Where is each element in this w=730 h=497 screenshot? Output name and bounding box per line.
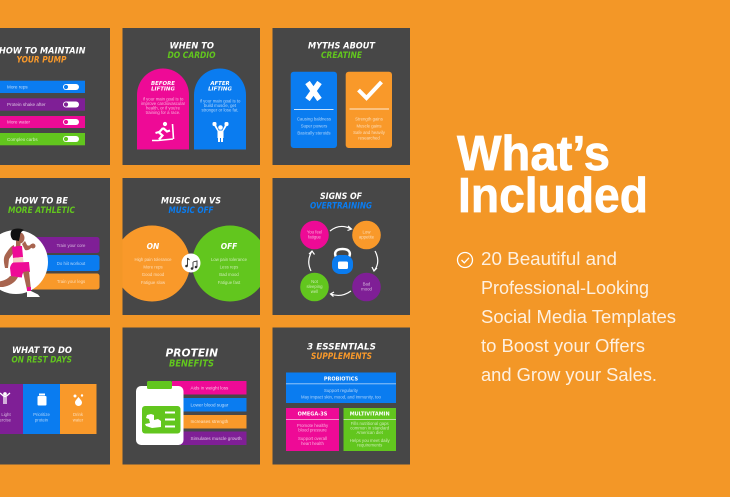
heading: do cardio: DO CARDIO (168, 51, 216, 61)
icon: weightlifter (212, 122, 228, 142)
circle: not sleeping well: well (311, 289, 318, 294)
panel: how to be more athletic (0, 178, 110, 315)
title: what's included (457, 127, 648, 223)
circle: you feel fatigue (300, 221, 329, 249)
heading: music on vs: MUSIC ON VS (161, 196, 221, 206)
arch: before lifting (137, 68, 189, 150)
illustration: athlete lunging in white circle (0, 228, 48, 297)
heading: more athletic: MORE ATHLETIC (8, 206, 75, 216)
icon: treadmill runner (152, 122, 174, 140)
step: drink water: water (73, 418, 84, 422)
arch: after lifting: LIFTING (208, 86, 232, 92)
panel: 3 essentials supplements (272, 328, 410, 464)
step: light exercise (0, 384, 28, 434)
heading: when to: WHEN TO (170, 42, 214, 52)
toggle row: more water: More water (7, 120, 30, 125)
card: myths: Basically steroids (297, 130, 331, 136)
cycle arrows (309, 226, 378, 296)
panel: when to do cardio (122, 28, 260, 165)
card: omega-3s: Support overall (298, 436, 327, 441)
icon: figure with barbell (0, 393, 10, 404)
card: multivitamin: Helps you meet daily (350, 438, 390, 443)
pill: do hiit workout: Do hiit workout (57, 261, 86, 266)
card: myths: Super powers (301, 124, 327, 128)
step: prioritize protein: protein (35, 418, 49, 422)
step: prioritize protein (23, 384, 65, 434)
panel: music on vs music off (122, 178, 260, 315)
bar: increases strength: Increases strength (190, 419, 229, 424)
card: probiotics: Support regularity (324, 388, 359, 393)
card: multivitamin: common in standard (350, 426, 390, 430)
circle: low appetite: appetite (359, 234, 375, 240)
card: multivitamin: Fills nutritional gaps (351, 421, 389, 426)
card: facts (346, 72, 392, 148)
circle: off: OFF (221, 242, 238, 251)
pill: train your legs: Train your legs (57, 279, 85, 284)
bar: lower blood sugar: Lower blood sugar (190, 402, 229, 408)
description text (481, 249, 676, 385)
circle: off: Low pain tolerance (211, 257, 248, 262)
circle: bad mood: Bad (363, 282, 371, 286)
arch: after lifting: stronger or lose fat. (201, 108, 239, 112)
circle: bad mood (352, 273, 381, 301)
card: facts: Safe and heavily (353, 130, 386, 135)
circle: off: Bad mood (219, 272, 239, 277)
title: what's included: What’s (457, 127, 610, 181)
circle: off (193, 226, 260, 302)
heading: how to be: HOW TO BE (15, 196, 68, 206)
card: omega-3s: Promote healthy (297, 423, 329, 428)
card: probiotics: May impact skin, mood, and immunity, too (301, 394, 382, 400)
circle: on (122, 226, 189, 302)
heading: 3 essentials: 3 ESSENTIALS (307, 343, 376, 353)
bar: simulates muscle growth: Simulates muscle growth (190, 436, 242, 441)
circle: not sleeping well: sleeping (306, 284, 323, 289)
step: light exercise: Light (1, 412, 11, 417)
card: omega-3s: heart health (301, 441, 324, 446)
card: facts: researched (358, 136, 380, 140)
arch: after lifting: AFTER (209, 81, 230, 87)
description text: Professional-Looking (481, 278, 649, 298)
heading: creatine: CREATINE (321, 51, 362, 61)
heading: supplements: SUPPLEMENTS (311, 352, 372, 362)
panel: signs of overtraining (272, 178, 410, 315)
card: multivitamin (344, 408, 396, 451)
circle: not sleeping well (300, 273, 329, 301)
bar: aids in weight loss: Aids in weight loss (190, 386, 229, 390)
card: probiotics (286, 372, 396, 403)
toggle row: more reps: More reps (7, 85, 28, 90)
card: facts: Strength gains (355, 116, 383, 122)
card: myths: Causing baldness (297, 116, 331, 122)
card: omega-3s (286, 408, 339, 451)
arch: after lifting: build muscle, get (204, 103, 237, 108)
description text: Social Media Templates (481, 307, 676, 327)
card: multivitamin: American diet (357, 430, 384, 435)
panel: myths about creatine (272, 28, 410, 165)
arch: before lifting: If your main goal is to (143, 96, 184, 102)
heading: how to maintain: HOW TO MAINTAIN (0, 46, 86, 56)
icon: check mark (358, 82, 382, 98)
step: drink water: Drink (73, 412, 84, 417)
arch: before lifting: LIFTING (151, 86, 175, 92)
toggle row: protein shake after: Protein shake after (7, 102, 46, 107)
circle: off: Less reps (220, 264, 238, 270)
icon: protein jar (136, 381, 184, 445)
icon: kettlebell (332, 249, 353, 274)
circle: not sleeping well: Not (311, 279, 319, 284)
circle: low appetite (352, 221, 381, 249)
panel: how to maintain your pump (0, 28, 110, 165)
card: omega-3s: OMEGA-3S (298, 412, 328, 418)
icon: water drops (74, 394, 83, 406)
title: what's included: Included (458, 169, 648, 223)
toggle row: complex carbs: Complex carbs (7, 137, 38, 142)
icon: cross (308, 82, 320, 100)
heading: benefits: BENEFITS (169, 359, 214, 370)
panel: what to do on rest days (0, 328, 110, 464)
arch: after lifting (194, 68, 246, 150)
circle: on: ON (147, 242, 160, 251)
card: myths (291, 72, 337, 148)
icon: check circle (458, 252, 472, 268)
arch: before lifting: BEFORE (151, 81, 175, 87)
circle: on: Good mood (142, 272, 165, 277)
circle: on: Fatigue slow (141, 280, 166, 285)
card: multivitamin: MULTIVITAMIN (350, 412, 390, 418)
circle: bad mood: mood (361, 286, 372, 292)
circle: low appetite: Low (363, 230, 371, 234)
circle: on: More reps (143, 264, 163, 270)
card: probiotics: PROBIOTICS (324, 376, 359, 382)
description text: to Boost your Offers (481, 336, 645, 356)
arch: after lifting: If your main goal is to (200, 98, 241, 104)
circle: on: High pain tolerance (134, 257, 172, 262)
arch: before lifting: training for a race. (146, 110, 180, 115)
heading: protein: PROTEIN (166, 346, 218, 359)
card: facts: Muscle gains (356, 124, 382, 128)
icon: music notes (182, 254, 200, 272)
icon: protein tub (38, 394, 46, 406)
heading: your pump: YOUR PUMP (16, 56, 67, 66)
circle: you feel fatigue: fatigue (308, 234, 322, 240)
arch: before lifting: improve cardiovascular (141, 101, 186, 106)
arch: before lifting: health, or if you're (146, 106, 181, 110)
circle: you feel fatigue: You feel (307, 230, 322, 234)
heading: on rest days: ON REST DAYS (12, 356, 72, 366)
heading: overtraining: OVERTRAINING (310, 202, 372, 212)
heading: what to do: WHAT TO DO (12, 346, 72, 356)
card: omega-3s: blood pressure (298, 428, 327, 432)
heading: signs of: SIGNS OF (320, 192, 362, 202)
step: drink water (60, 384, 96, 434)
description text: 20 Beautiful and (481, 249, 617, 269)
description text: and Grow your Sales. (481, 365, 657, 385)
card: multivitamin: requirements (357, 442, 382, 448)
heading: music off: MUSIC OFF (168, 206, 214, 216)
step: prioritize protein: Prioritize (33, 412, 50, 417)
pill: train your core: Train your core (57, 243, 86, 248)
circle: off: Fatigue fast (218, 280, 241, 285)
heading: myths about: MYTHS ABOUT (308, 42, 376, 52)
panel: protein benefits (122, 328, 260, 464)
